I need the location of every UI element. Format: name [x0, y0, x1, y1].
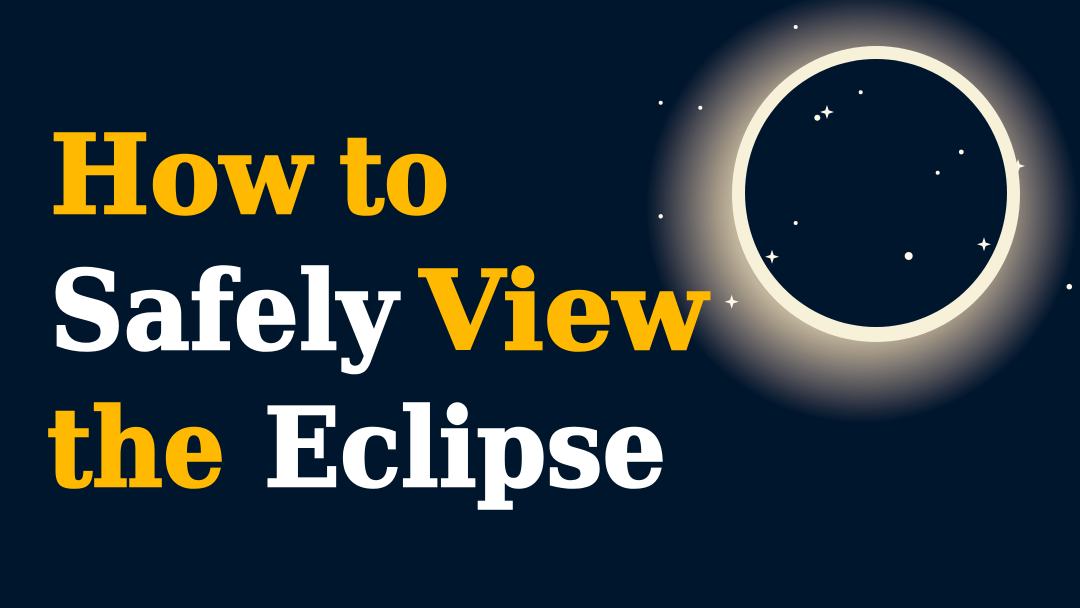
round stars	[658, 25, 1072, 290]
title	[47, 111, 710, 512]
stars partly hidden by the ring	[748, 108, 1025, 253]
title: Safely	[50, 247, 399, 375]
sparkle stars	[725, 105, 991, 309]
title: How	[50, 111, 314, 239]
corona glow	[646, 0, 1078, 423]
title: Eclipse	[264, 384, 666, 512]
eclipse ring	[732, 46, 1020, 342]
moon disc	[745, 59, 1007, 327]
title: the	[47, 384, 225, 512]
title: to	[339, 111, 449, 239]
title: View	[419, 247, 710, 375]
